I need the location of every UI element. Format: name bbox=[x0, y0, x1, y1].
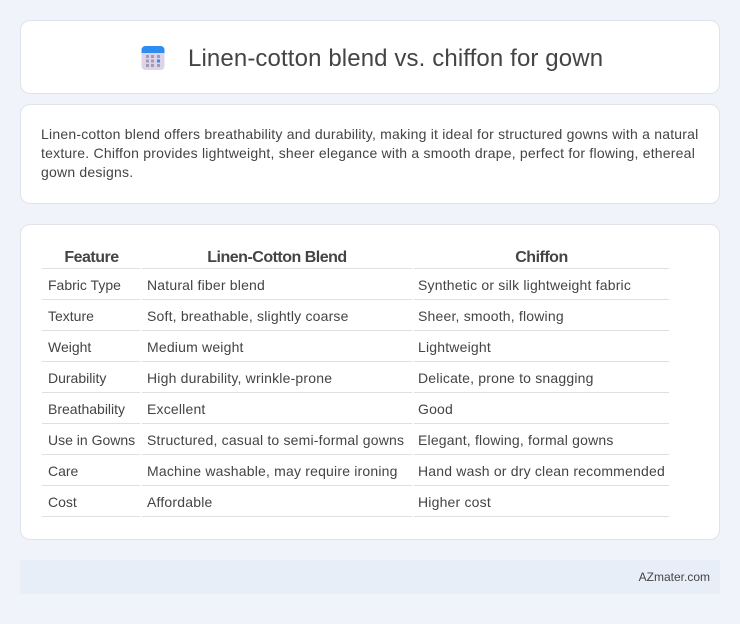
panel: comparison table: High durability, wrinkle-prone bbox=[147, 370, 332, 386]
panel: comparison table: Soft, breathable, slightly coarse bbox=[147, 308, 349, 324]
row: Care: Care bbox=[48, 463, 78, 479]
panel: comparison table: Structured, casual to semi-formal gowns bbox=[147, 432, 404, 448]
panel: comparison table: Lightweight bbox=[418, 339, 491, 355]
icon: calendar bbox=[142, 46, 164, 70]
row: Durability: Durability bbox=[48, 370, 106, 386]
panel: comparison table: Natural fiber blend bbox=[147, 277, 265, 293]
row: Breathability: Breathability bbox=[48, 401, 125, 417]
row: Weight: Weight bbox=[48, 339, 91, 355]
panel: comparison table: Chiffon bbox=[515, 249, 568, 266]
footer credit: AZmater.com bbox=[639, 570, 710, 584]
panel: comparison table: Excellent bbox=[147, 401, 206, 417]
table header: Feature bbox=[64, 249, 119, 266]
panel: comparison table bbox=[20, 224, 720, 540]
panel: comparison table: Machine washable, may require ironing bbox=[147, 463, 398, 479]
intro text: texture. Chiffon provides lightweight, sheer elegance with a smooth drape, perfect for flowing, ethereal bbox=[41, 145, 695, 161]
row: Cost: Cost bbox=[48, 494, 77, 510]
panel: comparison table: Higher cost bbox=[418, 494, 491, 510]
row: Texture: Texture bbox=[48, 308, 94, 324]
panel: comparison table: Affordable bbox=[147, 494, 212, 510]
panel: comparison table: Delicate, prone to snagging bbox=[418, 370, 594, 386]
intro text: gown designs. bbox=[41, 164, 133, 180]
intro text bbox=[41, 126, 699, 180]
panel: comparison table: Good bbox=[418, 401, 453, 417]
panel: comparison table: Synthetic or silk lightweight fabric bbox=[418, 277, 631, 293]
title: Linen-cotton blend vs. chiffon for gown bbox=[188, 45, 603, 72]
header panel bbox=[20, 20, 720, 94]
panel: comparison table: Linen-Cotton Blend bbox=[207, 249, 347, 266]
row: Fabric Type: Fabric Type bbox=[48, 277, 121, 293]
panel: comparison table: Elegant, flowing, formal gowns bbox=[418, 432, 614, 448]
panel: comparison table: Sheer, smooth, flowing bbox=[418, 308, 564, 324]
panel: comparison table: Medium weight bbox=[147, 339, 244, 355]
row: Use in Gowns: Use in Gowns bbox=[48, 432, 135, 448]
intro panel bbox=[20, 104, 720, 204]
footer bar bbox=[20, 560, 720, 594]
intro text: Linen-cotton blend offers breathability and durability, making it ideal for structured gowns with a natural bbox=[41, 126, 699, 142]
panel: comparison table: Hand wash or dry clean recommended bbox=[418, 463, 665, 479]
